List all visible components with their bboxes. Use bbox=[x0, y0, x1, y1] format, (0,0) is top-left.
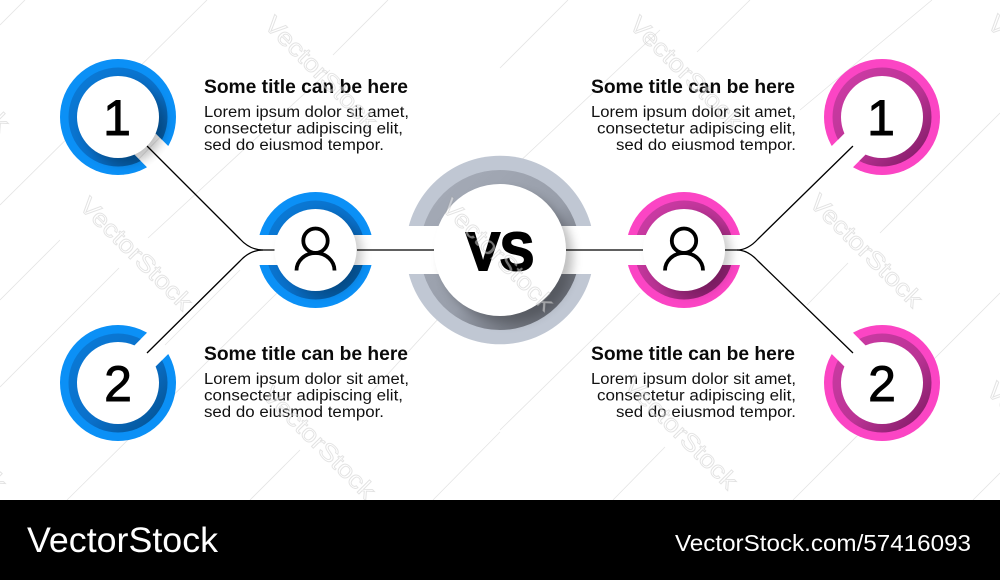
text block: pink 2: Some title can be here bbox=[591, 344, 795, 365]
connector lines: right hub to items bbox=[725, 146, 853, 353]
connector lines: hubs to VS bbox=[357, 249, 643, 251]
footer bar: VectorStock bbox=[27, 521, 219, 560]
badge: pink 2 bbox=[824, 325, 940, 441]
connector lines: left hub to items bbox=[147, 146, 275, 353]
text block: pink 1: Lorem ipsum dolor sit amet, bbox=[591, 104, 796, 121]
badge: pink 2: 2 bbox=[868, 356, 896, 412]
text block: pink 1: Some title can be here bbox=[591, 77, 795, 98]
watermark text: VectorStock bbox=[804, 189, 928, 314]
text block: pink 2: consectetur adipiscing elit, bbox=[597, 388, 796, 404]
icon: person bbox=[665, 228, 703, 270]
text block: pink 2 bbox=[591, 344, 796, 421]
badge: blue 2: 2 bbox=[104, 356, 132, 412]
text block: pink 1: consectetur adipiscing elit, bbox=[597, 120, 796, 138]
text block: pink 1 bbox=[591, 77, 796, 154]
text block: blue 1: Lorem ipsum dolor sit amet, bbox=[204, 104, 409, 121]
hub: pink person bbox=[626, 192, 742, 308]
text block: blue 1 bbox=[204, 77, 409, 154]
text block: blue 1: sed do eiusmod tempor. bbox=[204, 137, 384, 154]
VS badge: VS bbox=[466, 222, 534, 282]
hub: blue person bbox=[258, 192, 374, 308]
footer bar: VectorStock.com/57416093 bbox=[675, 530, 971, 556]
text block: blue 2: Some title can be here bbox=[204, 344, 408, 365]
footer bar bbox=[0, 500, 1000, 580]
text block: blue 1: consectetur adipiscing elit, bbox=[204, 120, 403, 138]
badge: pink 1: 1 bbox=[867, 90, 895, 146]
watermark text: VectorStock bbox=[74, 192, 198, 317]
badge: pink 1 bbox=[824, 59, 940, 175]
text block: pink 2: sed do eiusmod tempor. bbox=[616, 404, 796, 421]
watermark text: VectorStock bbox=[436, 193, 560, 318]
watermark text: VectorStock bbox=[624, 11, 748, 136]
badge: blue 1: 1 bbox=[103, 90, 131, 146]
badge: blue 2 bbox=[60, 325, 176, 441]
text block: blue 2: sed do eiusmod tempor. bbox=[204, 404, 384, 421]
text block: pink 1: sed do eiusmod tempor. bbox=[616, 137, 796, 154]
watermark text: VectorStock bbox=[259, 11, 383, 136]
badge: blue 1 bbox=[60, 59, 176, 175]
text block: blue 1: Some title can be here bbox=[204, 77, 408, 98]
watermark text: VectorStock bbox=[619, 371, 743, 496]
text block: blue 2 bbox=[204, 344, 409, 421]
text block: blue 2: consectetur adipiscing elit, bbox=[204, 388, 403, 404]
watermark text: VectorStock bbox=[257, 381, 381, 506]
text block: blue 2: Lorem ipsum dolor sit amet, bbox=[204, 371, 409, 388]
VS badge bbox=[406, 156, 594, 344]
text block: pink 2: Lorem ipsum dolor sit amet, bbox=[591, 371, 796, 388]
icon: person bbox=[296, 228, 334, 270]
